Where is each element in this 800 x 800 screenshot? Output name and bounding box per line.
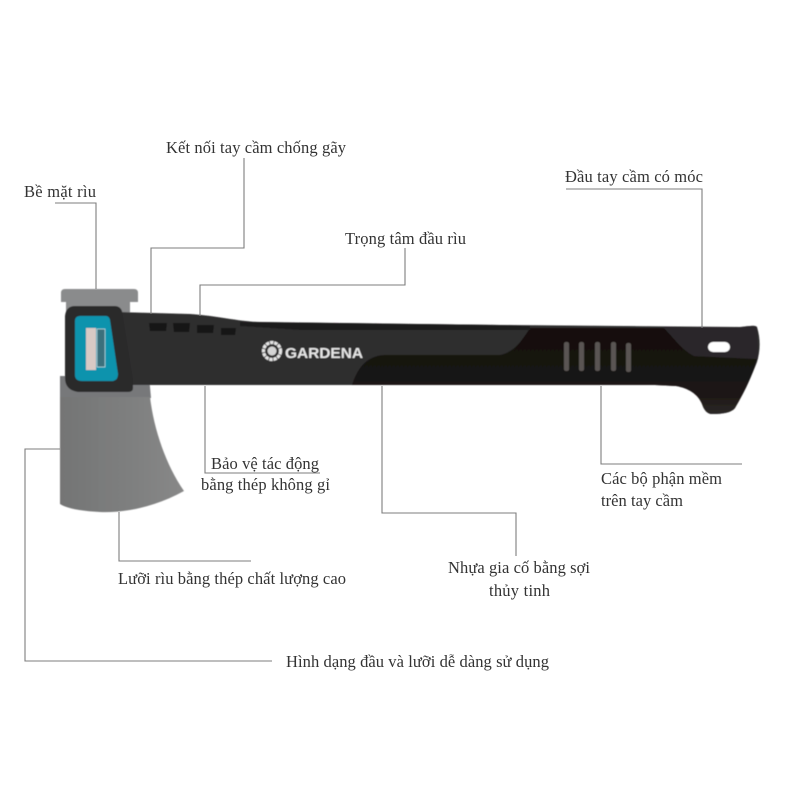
- label: lưỡi rìu: Lưỡi rìu bằng thép chất lượng cao: [118, 569, 346, 588]
- teal label: [75, 316, 118, 381]
- handle dark soft grip: [352, 328, 757, 414]
- leader: lưỡi rìu: [119, 512, 251, 561]
- leader: hình dạng: [25, 449, 272, 661]
- leader: bề mặt rìu: [55, 203, 96, 289]
- label: các bộ phận mềm: Các bộ phận mềm: [601, 469, 722, 488]
- head end lighter panel: [664, 326, 758, 359]
- handle: [118, 312, 760, 414]
- label: kết nối tay cầm: Kết nối tay cầm chống gãy: [166, 138, 347, 157]
- leader: kết nối tay cầm: [151, 158, 244, 314]
- axe head top face: [61, 289, 138, 320]
- label: đầu tay cầm: Đầu tay cầm có móc: [565, 167, 703, 186]
- label: bảo vệ tác động: bằng thép không gỉ: [201, 475, 330, 494]
- logo flower: [264, 342, 280, 360]
- head plate: [65, 306, 133, 392]
- leader: bộ phận mềm: [601, 386, 742, 464]
- label: hình dạng: Hình dạng đầu và lưỡi dễ dàng sử dụng: [286, 652, 549, 671]
- label sticker: [86, 328, 96, 370]
- leader lines: [25, 158, 742, 661]
- soft grip ribs: [564, 342, 631, 372]
- leader: bảo vệ tác động: [205, 386, 320, 473]
- axe head collar: [60, 376, 151, 398]
- label box: [97, 329, 105, 367]
- label: nhựa gia cố: thủy tinh: [489, 581, 551, 600]
- label: trọng tâm đầu rìu: Trọng tâm đầu rìu: [345, 229, 466, 248]
- axe blade: [60, 397, 184, 512]
- handle top dark band: [240, 322, 530, 330]
- leader: đầu tay cầm: [566, 189, 702, 328]
- illustration: axe: [60, 289, 760, 512]
- GARDENA logo: [264, 342, 364, 362]
- label: bề mặt rìu: Bề mặt rìu: [24, 182, 96, 201]
- leader: nhựa gia cố: [382, 386, 516, 556]
- label: bảo vệ tác động: Bảo vệ tác động: [211, 454, 319, 473]
- logo wordmark: GARDENA: [285, 346, 364, 362]
- handle vents left: [149, 323, 236, 335]
- label: các bộ phận mềm: trên tay cầm: [601, 491, 683, 510]
- label: nhựa gia cố: Nhựa gia cố bằng sợi: [448, 558, 590, 577]
- hanging hole: [708, 342, 730, 352]
- leader: trọng tâm: [200, 248, 405, 316]
